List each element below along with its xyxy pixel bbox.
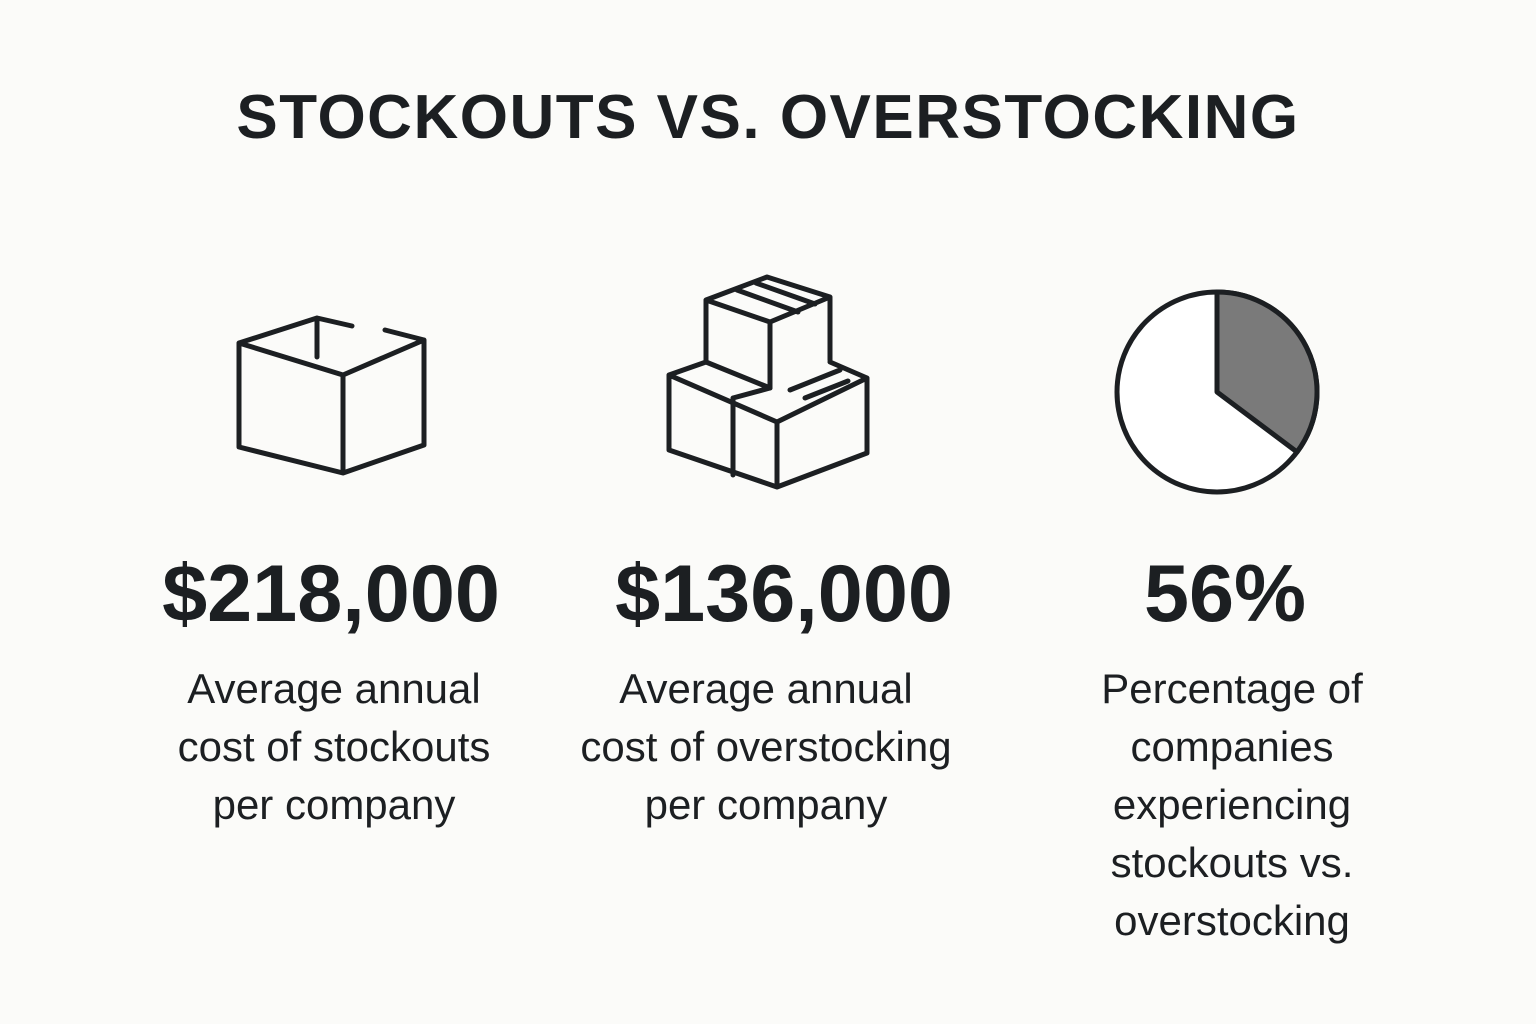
desc: overstocking: per company: [645, 781, 887, 828]
stat: stockouts: $218,000: [162, 549, 500, 639]
desc: percentage: stockouts vs.: [1111, 839, 1353, 886]
desc: overstocking: Average annual: [619, 665, 913, 712]
desc: stockouts: cost of stockouts: [178, 723, 490, 770]
desc: percentage: [1101, 665, 1363, 944]
desc: overstocking: cost of overstocking: [580, 723, 952, 770]
title: STOCKOUTS VS. OVERSTOCKING: [236, 83, 1300, 152]
icon: open box: [239, 318, 424, 473]
icon: stacked boxes: [669, 277, 867, 487]
desc: percentage: companies: [1130, 723, 1334, 770]
stat: overstocking: $136,000: [615, 549, 953, 639]
icon: pie chart: [1117, 292, 1317, 492]
desc: stockouts: per company: [213, 781, 455, 828]
stat: percentage: 56%: [1144, 549, 1306, 639]
desc: percentage: overstocking: [1114, 897, 1350, 944]
desc: stockouts: [178, 665, 490, 828]
desc: overstocking: [580, 665, 952, 828]
desc: percentage: Percentage of: [1101, 665, 1363, 712]
desc: stockouts: Average annual: [187, 665, 481, 712]
desc: percentage: experiencing: [1113, 781, 1351, 828]
